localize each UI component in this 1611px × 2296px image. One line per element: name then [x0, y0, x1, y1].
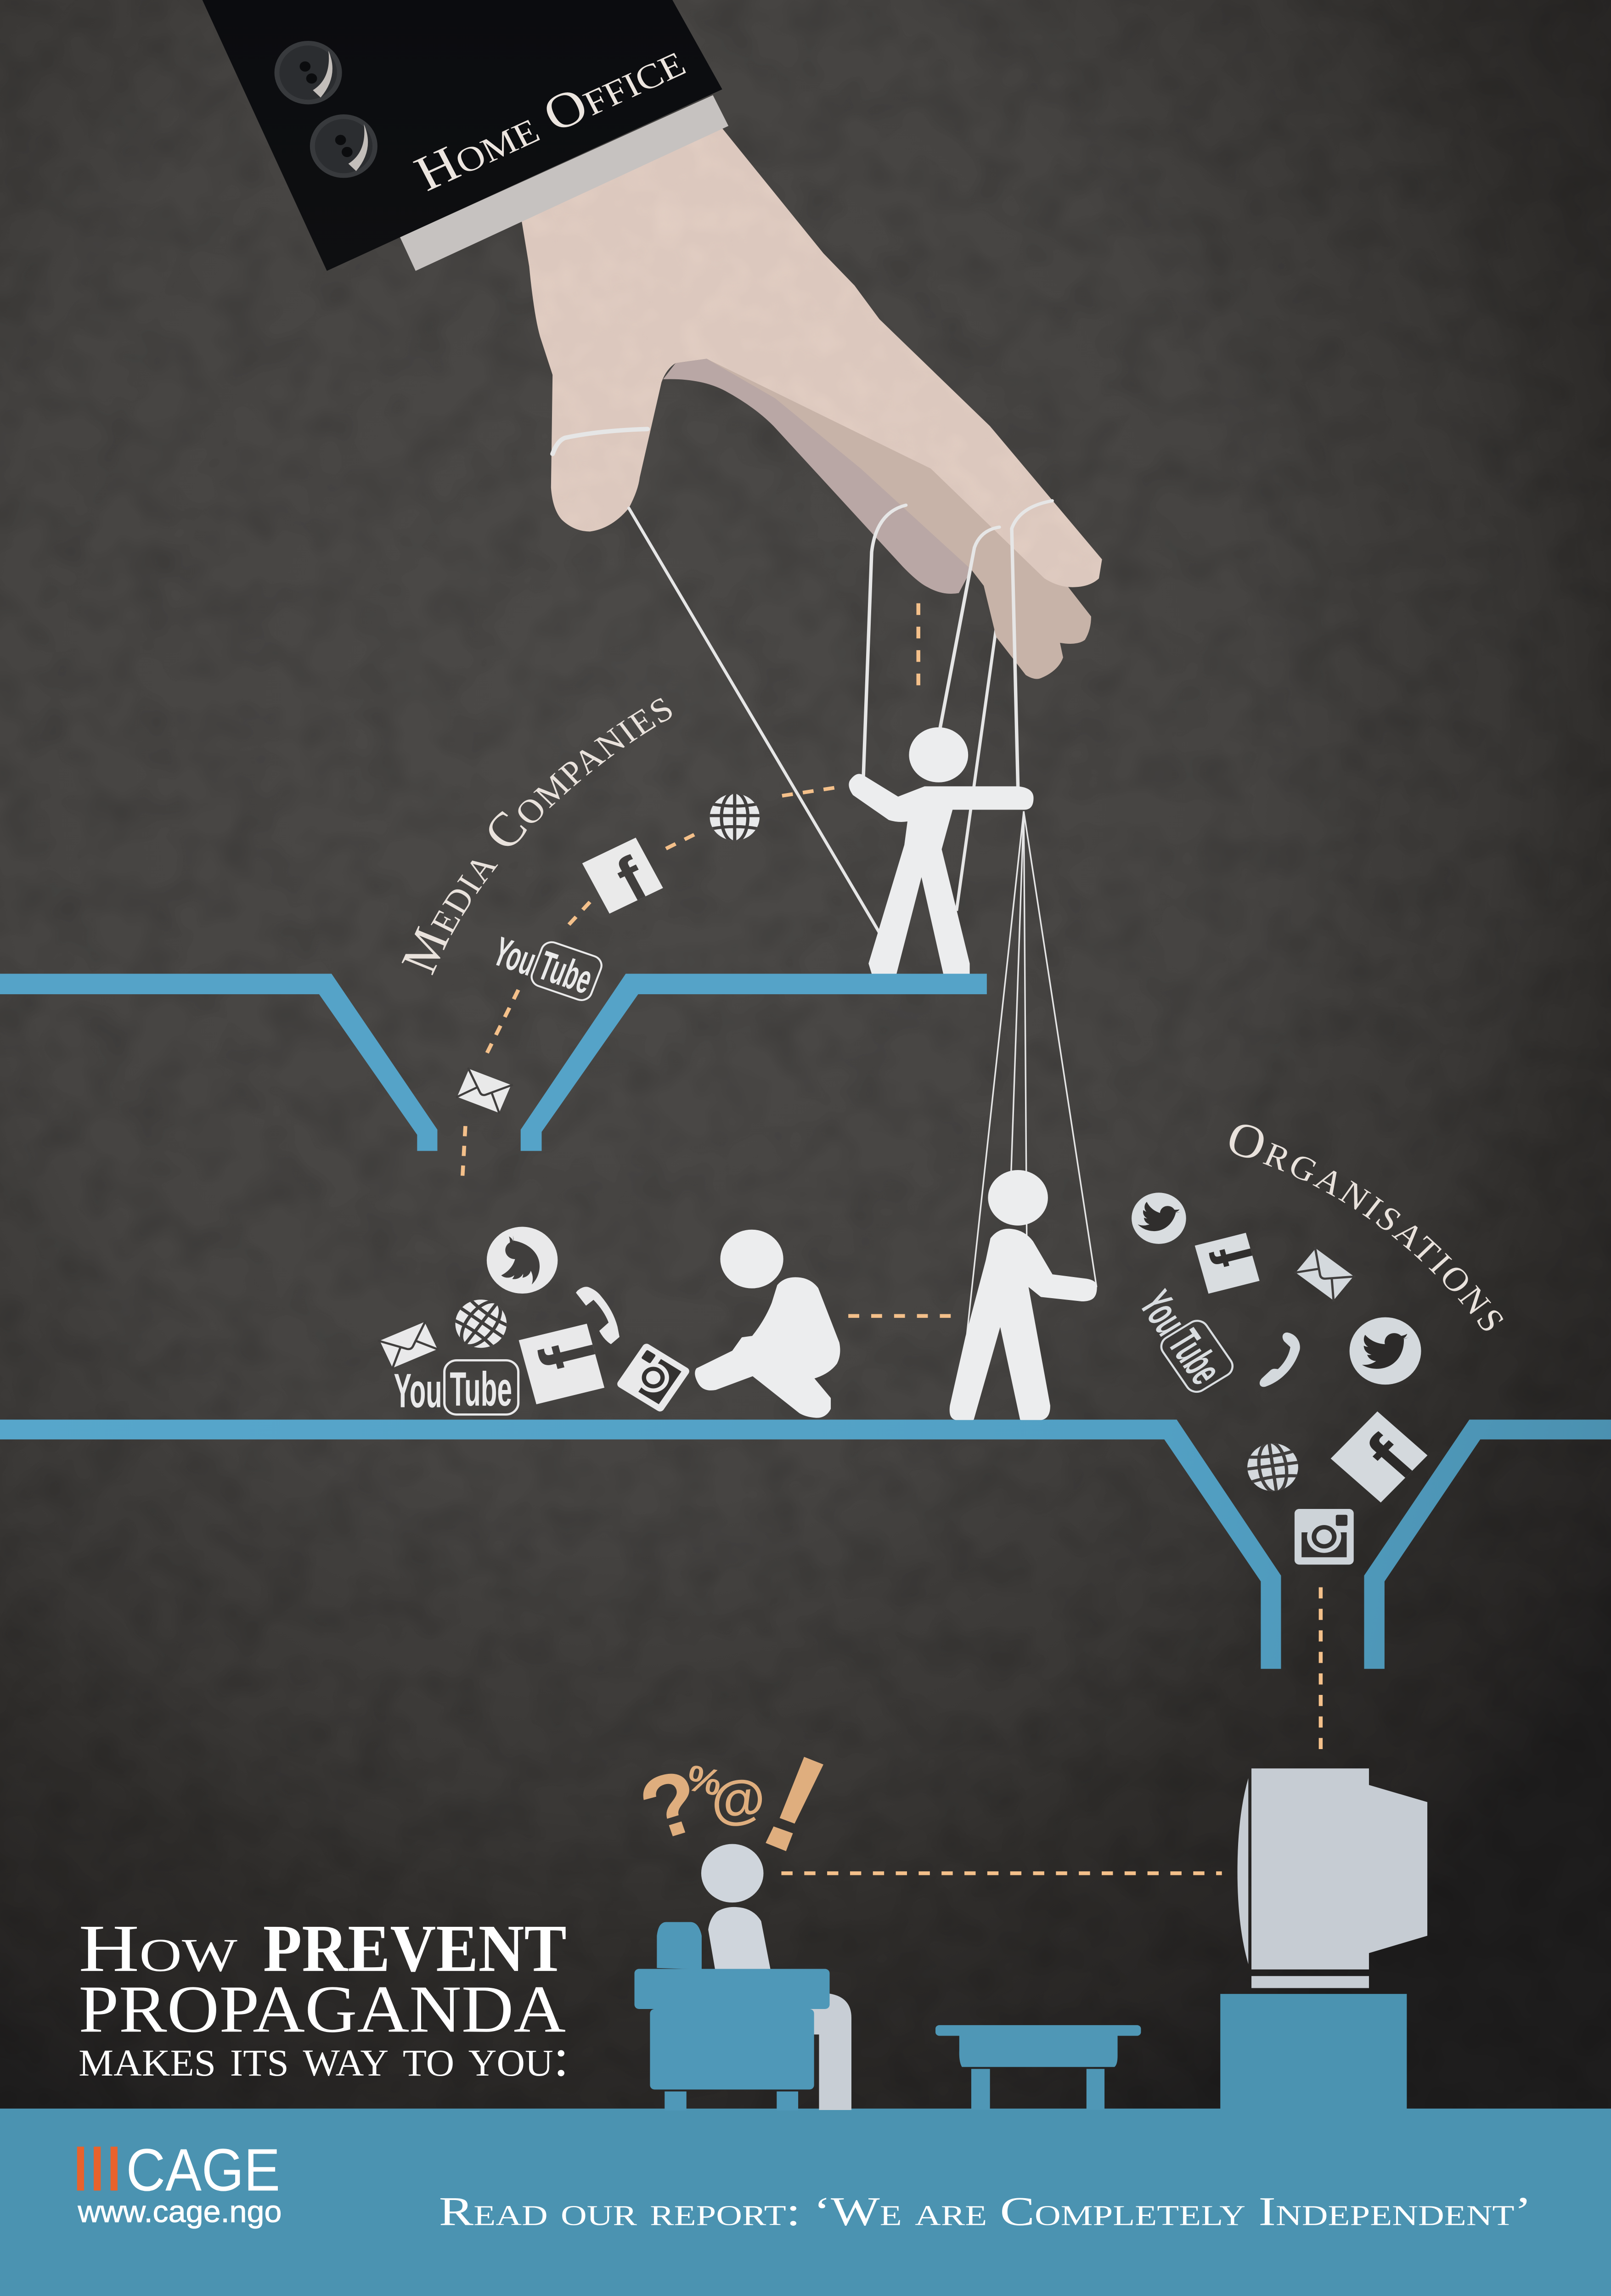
icon: twitter in heap	[487, 1227, 558, 1294]
CAGE logo	[77, 2136, 280, 2204]
upper puppet figure: head and body	[849, 727, 1034, 974]
black jacket sleeve with Home Office label	[203, 0, 722, 271]
icon: YouTube logo in heap: You	[394, 1364, 442, 1418]
button 2	[310, 114, 377, 178]
title	[79, 1911, 569, 2088]
icon: phone	[1260, 1333, 1300, 1387]
shirt cuff	[400, 95, 728, 271]
label: Organisations: Organisations	[1220, 1110, 1525, 1343]
icon: envelope	[456, 1068, 513, 1114]
icon: facebook diamond: f	[1352, 1422, 1429, 1493]
icon: envelope	[1294, 1247, 1355, 1302]
icon: YouTube logo in heap: Tube	[450, 1362, 512, 1416]
CAGE logo: CAGE	[126, 2136, 280, 2204]
button 1	[275, 41, 342, 104]
symbol: percent: %	[683, 1757, 726, 1804]
dashed line from viewer to TV	[781, 1873, 1222, 1874]
icon: twitter small	[1132, 1193, 1186, 1244]
finger rings and marionette strings	[552, 429, 1052, 933]
icon: twitter large	[1350, 1317, 1421, 1384]
icon: YouTube logo: You	[487, 928, 543, 985]
icon: YouTube logo	[487, 926, 604, 1005]
symbol: question mark: ?	[628, 1750, 714, 1860]
icon: YouTube logo rotated: You	[1130, 1283, 1197, 1343]
website URL: www.cage.ngo	[77, 2194, 282, 2229]
television	[1238, 1768, 1427, 1988]
viewer: leg	[809, 1994, 851, 2110]
armchair	[635, 1922, 830, 2110]
confused symbols above viewer	[628, 1750, 823, 1860]
middle blue platform with funnel	[0, 1420, 1611, 1669]
icon: YouTube logo rotated: Tube	[1159, 1322, 1232, 1392]
icon: globe	[1242, 1439, 1303, 1496]
symbol: exclamation mark	[766, 1757, 823, 1851]
title word: PREVENT: PREVENT	[263, 1911, 567, 1986]
dashed link between seated figure and puppet	[848, 1315, 952, 1317]
icon: facebook diamond	[1331, 1412, 1439, 1513]
icon: YouTube logo: Tube	[532, 942, 599, 1002]
symbol: at sign: @	[708, 1768, 768, 1832]
coffee table	[935, 2025, 1141, 2110]
upper blue platform with funnel	[0, 974, 987, 1151]
label: Media Companies: Media Companies	[390, 678, 683, 981]
hand of the Home Office	[521, 124, 1102, 679]
bottom blue footer band	[0, 2109, 1611, 2296]
dashed path from puppet through media companies funnel	[462, 788, 834, 1180]
icon: globe	[708, 792, 761, 842]
label: Home Office: Home Office	[406, 32, 693, 202]
title word: How: How	[79, 1911, 237, 1986]
icon: facebook in heap: f	[524, 1333, 613, 1377]
seated figure with consumed media	[696, 1231, 839, 1417]
dashed path from funnel to TV	[1320, 1587, 1321, 1751]
icon: instagram	[1295, 1509, 1354, 1564]
title line 3: makes its way to you:	[79, 2028, 569, 2088]
icon: facebook small	[1195, 1230, 1272, 1294]
icon: phone in heap	[576, 1287, 620, 1344]
puppet string behind the hand	[957, 628, 996, 911]
icon: facebook square: f	[605, 844, 659, 915]
lower puppet figure: head and body	[951, 1171, 1096, 1419]
dashed path from hand to puppet	[918, 603, 919, 694]
back finger	[663, 359, 974, 594]
thin strings to lower puppet	[967, 811, 1097, 1337]
TV stand	[1220, 1994, 1407, 2111]
call to action: report: Read our report: ‘We are Completely Independent’	[439, 2189, 1532, 2234]
icon: YouTube logo rotated	[1130, 1281, 1237, 1397]
main hand and thumb	[521, 124, 1102, 587]
middle finger	[707, 359, 1091, 679]
viewer: head and torso	[701, 1844, 771, 1970]
icon: facebook square	[582, 838, 670, 926]
title line 2: PROPAGANDA	[79, 1972, 566, 2046]
icon: envelope in heap	[378, 1321, 439, 1369]
icon: instagram in heap	[616, 1342, 691, 1413]
icon: facebook small: f	[1199, 1240, 1266, 1273]
icon: facebook in heap	[519, 1320, 620, 1404]
icon: globe in heap	[443, 1288, 519, 1360]
